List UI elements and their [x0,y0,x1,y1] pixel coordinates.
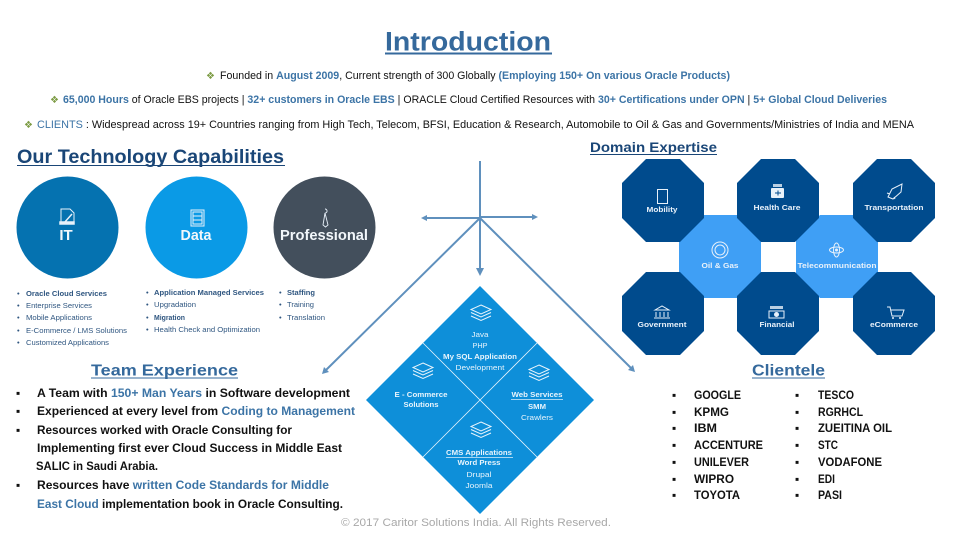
quadrant: e-commerce: Solutions [404,400,438,409]
list: team bullets: Resources have written Code Standards for Middle [37,478,329,492]
list: team bullets: Implementing first ever Cloud Success in Middle East [37,441,342,455]
list: clients column one [672,388,763,502]
list: IT services: E-Commerce / LMS Solutions [26,326,127,335]
quadrant: cms applications: Word Press [458,458,500,467]
quadrant: application development: Java [472,330,489,339]
circle: Data: Data [180,227,212,244]
list: professional services: • [279,313,282,322]
circle: IT [16,176,118,278]
list: IT services: Enterprise Services [26,301,92,310]
octagon: transportation: Transportation [864,203,924,212]
list: IT services: • [17,289,20,298]
copyright: © 2017 Caritor Solutions India. All Rights Reserved. [341,517,611,529]
quadrant: cms applications: CMS Applications [446,448,512,457]
list: team bullets: ▪ [16,404,20,418]
list: professional services: • [279,288,282,297]
circle: Data [146,176,248,278]
list: data services: • [146,313,149,322]
list: clients column one: KPMG [694,405,729,419]
quadrant: cms applications [446,422,513,490]
octagon: government: Government [638,320,687,329]
quadrant: web services [511,365,563,422]
octagon: financial: Financial [760,320,794,329]
heading: team experience: Team Experience [91,362,238,380]
list: clients column two: ▪ [795,455,799,469]
list: clients column two: VODAFONE [818,455,882,469]
heading: clientele: Clientele [752,362,825,380]
octagon: ecommerce [853,272,935,355]
heading: our technology capabilities: Our Technology Capabilities [17,147,284,168]
quadrant: cms applications: Drupal [466,470,492,479]
list: clients column one: ▪ [672,488,676,502]
heading: domain expertise: Domain Expertise [590,140,718,155]
circle: Professional [274,176,376,278]
list: data services [146,288,264,334]
list: clients column two: PASI [818,488,842,502]
quadrant: web services: SMM [528,402,546,411]
list: clients column one: ▪ [672,438,676,452]
list: data services: Application Managed Services [154,288,264,297]
arrows: central connector [322,161,635,374]
panel: team experience [16,362,355,511]
list: team bullets: Experienced at every level from Coding to Management [37,404,355,418]
list: professional services: Staffing [287,288,315,297]
list: data services: • [146,325,149,334]
list: clients column two: ▪ [795,438,799,452]
octagon: transportation [853,159,935,242]
octagon: mobility: Mobility [646,205,678,214]
octagon: oil and gas [679,215,761,298]
quadrant: application development: Development [456,363,506,372]
list: clients column one: GOOGLE [694,388,741,402]
list: professional services: Translation [287,313,325,322]
list: team bullets: East Cloud implementation book in Oracle Consulting. [37,497,343,511]
quadrant: web services: Crawlers [521,413,553,422]
intro bullet: projects: 65,000 Hours of Oracle EBS projects | 32+ customers in Oracle EBS | ORACLE Cloud Certified Resources with 30+ Certifications under OPN | 5+ Global Cloud Deliveries [63,94,887,106]
octagon: oil and gas: Oil & Gas [702,261,738,270]
list: professional services: Training [287,300,314,309]
list: IT services [17,289,127,347]
octagon: health care [737,159,819,242]
octagon: ecommerce: eCommerce [870,320,918,329]
intro bullet: founding: ❖ [206,71,215,82]
octagon: financial [737,272,819,355]
list: clients column one: ▪ [672,405,676,419]
list: professional services: • [279,300,282,309]
title: Introduction [385,26,551,56]
quadrant: e-commerce: E - Commerce [394,390,448,399]
octagon: government [622,272,704,355]
quadrant: e-commerce [394,363,448,409]
list: IT services: • [17,338,20,347]
octagon: health care: Health Care [754,203,800,212]
quadrant: cms applications: Joomla [466,481,493,490]
panel: technology capabilities [16,147,376,347]
list: clients column one: ▪ [672,472,676,486]
circle: IT: IT [59,227,73,244]
list: clients column one: ▪ [672,421,676,435]
quadrant: application development [443,305,517,372]
list: clients column two: ▪ [795,405,799,419]
list: clients column two: ZUEITINA OIL [818,421,892,435]
list: clients column two: RGRHCL [818,405,863,419]
list: clients column two [795,388,892,502]
intro bullet: founding: Founded in August 2009, Current strength of 300 Globally (Employing 150+ On various Oracle Products) [220,70,730,82]
list: clients column two: ▪ [795,488,799,502]
list: clients column two: ▪ [795,472,799,486]
quadrant: application development: My SQL Application [443,352,517,361]
list: team bullets: ▪ [16,478,20,492]
intro bullet: clients: ❖ [24,120,33,131]
panel: clientele [672,362,892,502]
list: team bullets: Resources worked with Oracle Consulting for [37,423,292,437]
list: IT services: • [17,313,20,322]
list: clients column one: ▪ [672,455,676,469]
octagon: telecommunication: Telecommunication [798,261,877,270]
quadrant: web services: Web Services [512,390,562,399]
intro bullet: projects: ❖ [50,95,59,106]
list: data services: Upgradation [154,300,196,309]
list: clients column one: UNILEVER [694,455,749,469]
list: team bullets: SALIC in Saudi Arabia. [36,459,158,473]
list: IT services: • [17,326,20,335]
list: clients column one: TOYOTA [694,488,740,502]
list: clients column one: IBM [694,421,717,435]
list: clients column two: STC [818,438,838,452]
list: clients column two: ▪ [795,388,799,402]
list: IT services: Customized Applications [26,338,109,347]
list: data services: • [146,300,149,309]
octagon: mobility [622,159,704,242]
intro bullet: clients: CLIENTS : Widespread across 19+ Countries ranging from High Tech, Telecom, BFSI, Education & Research, Automobile to Oil & Gas and Governments/Ministries of India and MENA [37,119,915,131]
circle: Professional: Professional [280,227,368,244]
list: team bullets [16,386,355,511]
quadrant: application development: PHP [472,341,488,350]
octagon: telecommunication [796,215,878,298]
list: team bullets: ▪ [16,386,20,400]
list: data services: Migration [154,313,185,322]
list: data services: Health Check and Optimization [154,325,260,334]
panel: domain expertise [590,140,935,355]
list: IT services: • [17,301,20,310]
list: IT services: Mobile Applications [26,313,92,322]
list: team bullets: ▪ [16,423,20,437]
list: clients column two: TESCO [818,388,854,402]
list: data services: • [146,288,149,297]
list: IT services: Oracle Cloud Services [26,289,107,298]
list: clients column one: ▪ [672,388,676,402]
list: clients column one: WIPRO [694,472,734,486]
list: clients column two: EDI [818,472,835,486]
diamond: technology stacks [366,286,594,514]
list: professional services [279,288,325,322]
list: clients column one: ACCENTURE [694,438,763,452]
list: clients column two: ▪ [795,421,799,435]
list: team bullets: A Team with 150+ Man Years in Software development [37,386,350,400]
